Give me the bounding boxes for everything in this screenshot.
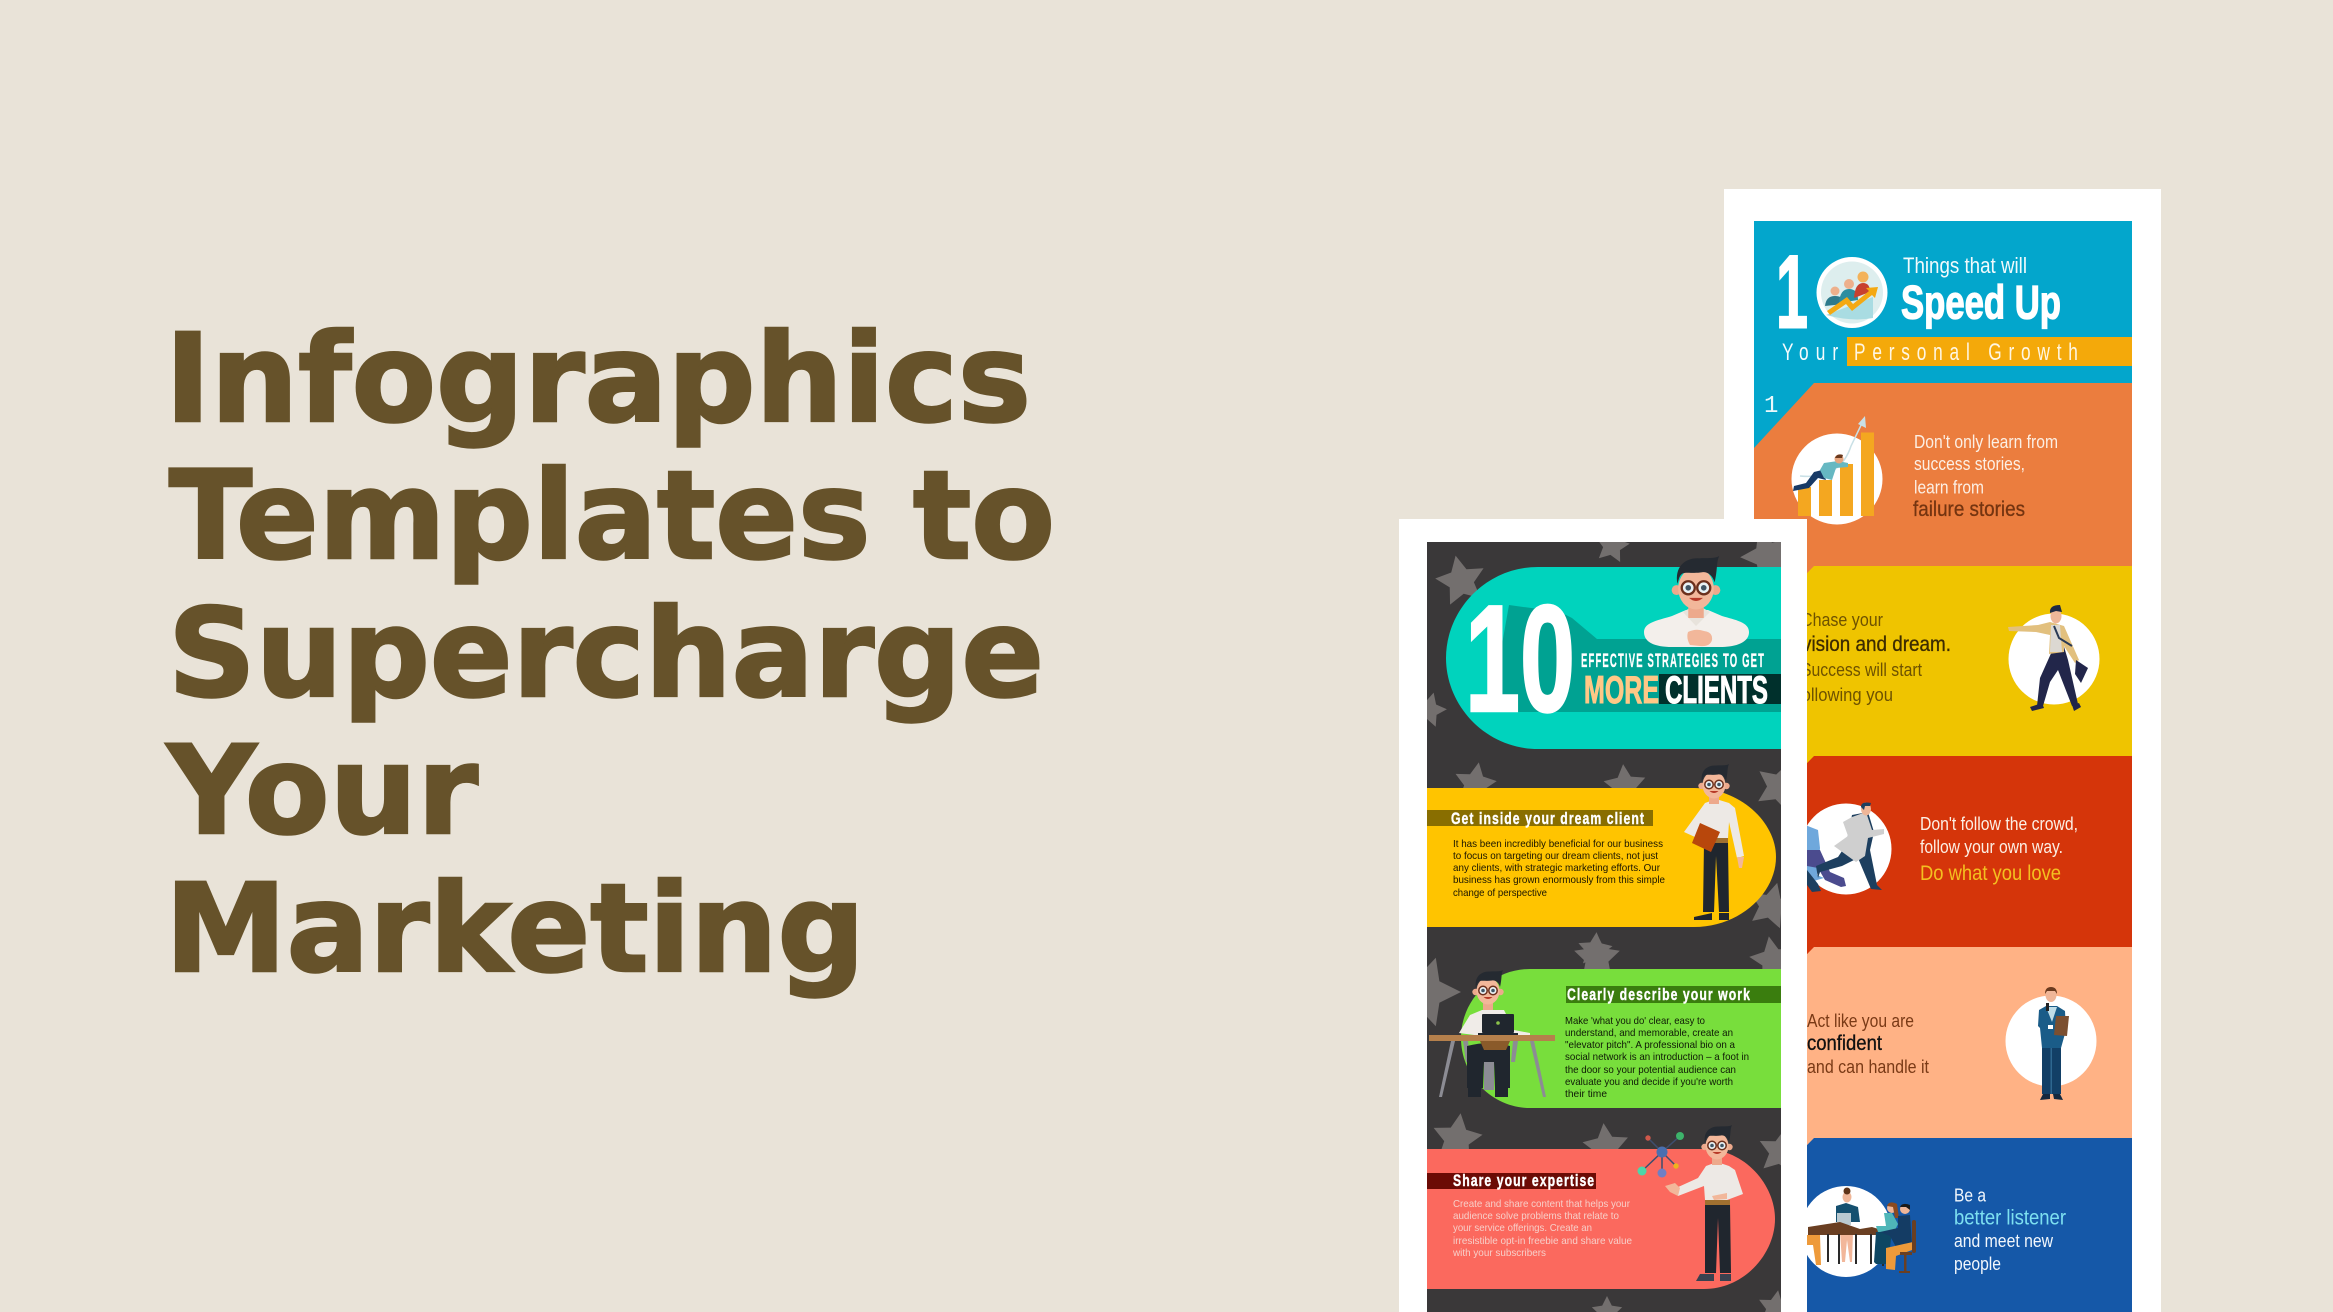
- header text: Things that will Speed Up: [1901, 253, 2061, 328]
- text: Don't only learn from success stories, learn from failure stories: [1913, 432, 2058, 521]
- text: Don't only learn from success stories, learn from failure stories: success stories,: [1914, 454, 2025, 474]
- icon: team with rising arrow: [1816, 257, 1888, 328]
- text: Chase your vision and dream: [1797, 610, 1951, 705]
- icon: man with clipboard: [2006, 987, 2096, 1100]
- character: cheering man: [1644, 556, 1749, 647]
- icon: man climbing bar chart: [1792, 416, 1882, 524]
- body text: [1565, 1015, 1749, 1100]
- section: act confident: [1754, 947, 2132, 1180]
- body text: any clients, with strategic marketing efforts. Our: [1453, 862, 1660, 874]
- section: failure stories: [1754, 383, 2132, 600]
- text: Don't follow the crowd, Do what you love: follow your own way.: [1920, 837, 2063, 857]
- headline: MORE CLIENTS: CLIENTS: [1665, 669, 1768, 712]
- body text: [1452, 1198, 1632, 1259]
- body text: It has been incredibly beneficial for our business: [1453, 838, 1663, 850]
- text: Don't only learn from success stories, learn from failure stories: learn from: [1914, 478, 1984, 498]
- heading bar: Get inside your dream client: [1451, 810, 1644, 829]
- body text: to focus on targeting our dream clients, not just: [1453, 850, 1658, 862]
- section: follow your own way: [1754, 756, 2132, 990]
- header ribbon: Your Personal Growth: Personal Growth: [1854, 339, 2078, 366]
- headline: MORE CLIENTS: MORE: [1584, 669, 1659, 712]
- icon: network nodes: [1638, 1132, 1684, 1178]
- text: Chase your vision and dream: Success will start: [1801, 660, 1922, 680]
- body text: [1453, 838, 1665, 899]
- text: Don't only learn from success stories, learn from failure stories: Don't only learn from: [1914, 432, 2058, 452]
- panel: more clients infographic card: [1396, 519, 1812, 1312]
- text: Act like you are confident: [1807, 1011, 1929, 1077]
- body text: business has grown enormously from this simple: [1453, 874, 1665, 886]
- header ribbon: Your Personal Growth: [1782, 337, 2132, 366]
- section: better listener: [1754, 1138, 2132, 1312]
- text: Don't follow the crowd, Do what you love: Do what you love: [1920, 862, 2061, 885]
- header ribbon: Your Personal Growth: Your: [1782, 339, 1838, 366]
- body text: understand, and memorable, create an: [1565, 1027, 1733, 1039]
- body text: Make 'what you do' clear, easy to: [1565, 1015, 1705, 1027]
- body text: social network is an introduction – a foot in: [1565, 1051, 1749, 1063]
- header text: Things that will Speed Up: Speed Up: [1901, 276, 2061, 328]
- dark starry background: [1427, 542, 1781, 1312]
- text: Don't follow the crowd, Do what you love: [1920, 814, 2078, 885]
- body text: your service offerings. Create an: [1453, 1222, 1592, 1234]
- header: blue band: [1754, 221, 2132, 461]
- panel: clearly describe your work: [1429, 969, 1781, 1108]
- subtitle: EFFECTIVE STRATEGIES TO GET: [1581, 651, 1765, 672]
- text: Chase your vision and dream: vision and dream.: [1802, 633, 1951, 656]
- body text: with your subscribers: [1452, 1247, 1546, 1259]
- text: Act like you are confident: and can handle it: [1807, 1057, 1929, 1077]
- title: Infographics Templates to Supercharge Your Marketing: Templates to: [169, 445, 1055, 587]
- body text: evaluate you and decide if you're worth: [1565, 1076, 1733, 1088]
- section: vision and dream: [1754, 566, 2132, 800]
- title: Infographics Templates to Supercharge Your Marketing: Supercharge: [168, 583, 1044, 725]
- body text: change of perspective: [1453, 887, 1547, 899]
- heading bar: Share your expertise: [1453, 1172, 1594, 1191]
- text: Be a better listener and meet new people: Be a: [1954, 1186, 1987, 1206]
- text: Be a better listener and meet new people: better listener: [1954, 1206, 2066, 1230]
- title: Infographics Templates to Supercharge Your Marketing: Your: [165, 720, 478, 862]
- icon: team meeting at table: [1800, 1186, 1916, 1277]
- icon: runners: [1800, 802, 1892, 894]
- text: Be a better listener and meet new people: people: [1954, 1254, 2001, 1274]
- text: Act like you are confident: Act like you are: [1807, 1011, 1914, 1031]
- dark bar: [1659, 674, 1781, 704]
- icon: man pointing forward: [2008, 605, 2100, 711]
- title: Infographics Templates to Supercharge Your Marketing: Marketing: [165, 858, 865, 1000]
- body text: "elevator pitch". A professional bio on a: [1565, 1039, 1735, 1051]
- character: man with folder: [1684, 764, 1744, 920]
- panel: get inside your dream client: [1427, 764, 1776, 927]
- panel: share your expertise: [1427, 1125, 1775, 1289]
- body text: their time: [1565, 1088, 1607, 1100]
- heading bar: Clearly describe your work: [1567, 986, 1751, 1005]
- text: Act like you are confident: confident: [1807, 1032, 1882, 1055]
- text: Don't only learn from success stories, learn from failure stories: failure stories: [1913, 498, 2025, 521]
- numeral shadow band: [1490, 605, 1781, 712]
- header pill: 10 effective strategies: [1446, 556, 1781, 749]
- panel: personal growth infographic card: [1724, 189, 2161, 1312]
- text: Be a better listener and meet new people: [1954, 1186, 2066, 1274]
- body text: audience solve problems that relate to: [1453, 1210, 1619, 1222]
- body text: Create and share content that helps your: [1453, 1198, 1630, 1210]
- text: Be a better listener and meet new people: and meet new: [1954, 1231, 2054, 1251]
- text: Don't follow the crowd, Do what you love: Don't follow the crowd,: [1920, 814, 2078, 834]
- character: presenting man: [1665, 1125, 1743, 1281]
- body text: irresistible opt-in freebie and share value: [1453, 1235, 1632, 1247]
- character: man working at desk: [1429, 970, 1555, 1097]
- headline: MORE CLIENTS: [1584, 669, 1768, 712]
- header text: Things that will Speed Up: Things that will: [1903, 253, 2027, 278]
- header numeral 1: 1: [1776, 234, 1808, 350]
- numeral 10: 10: [1465, 574, 1575, 744]
- text: Chase your vision and dream: Chase your: [1801, 610, 1883, 630]
- text: Chase your vision and dream: following you: [1797, 685, 1893, 705]
- title: Infographics Templates to Supercharge Your Marketing: [165, 308, 1055, 1000]
- title: Infographics Templates to Supercharge Your Marketing: Infographics: [165, 308, 1031, 450]
- step number 1: 1: [1764, 393, 1778, 420]
- body text: the door so your potential audience can: [1565, 1064, 1736, 1076]
